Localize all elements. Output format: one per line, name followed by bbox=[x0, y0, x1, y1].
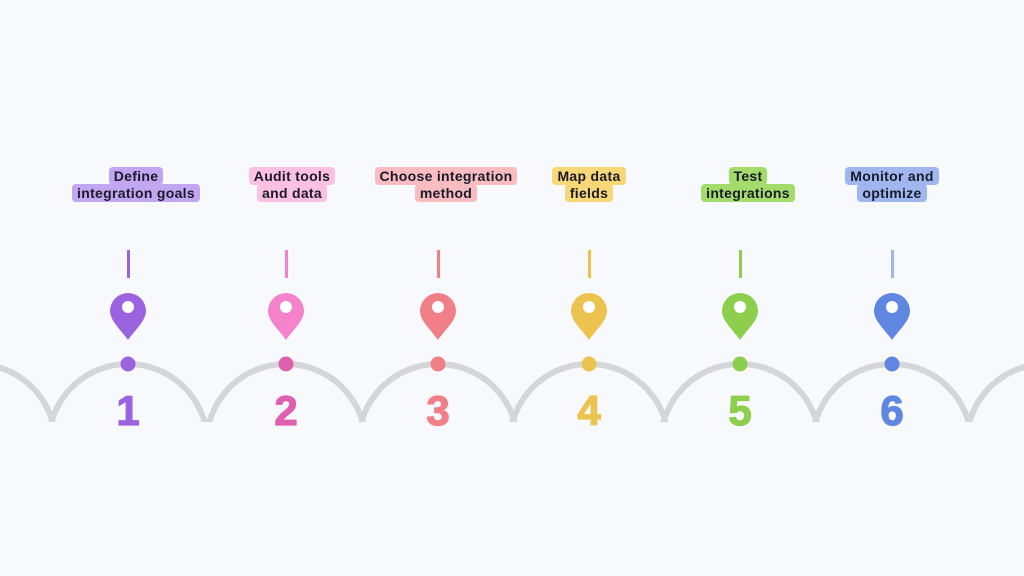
label 5: integrations bbox=[706, 185, 790, 201]
step 5 marker: 5 bbox=[728, 387, 752, 434]
step 1 marker: 1 bbox=[116, 387, 140, 434]
label 3 bbox=[375, 167, 517, 202]
step 3 marker: 3 bbox=[426, 387, 450, 434]
label 1: Define bbox=[114, 168, 158, 184]
label 5: Test bbox=[734, 168, 762, 184]
label 4 bbox=[552, 167, 626, 202]
label 4: fields bbox=[570, 185, 608, 201]
step 4 marker bbox=[571, 250, 607, 434]
step 5 marker bbox=[722, 250, 758, 434]
label 6: optimize bbox=[862, 185, 922, 201]
label 3: Choose integration bbox=[380, 168, 512, 184]
step 6 marker bbox=[874, 250, 910, 434]
label 2: Audit tools bbox=[254, 168, 330, 184]
label 2: and data bbox=[262, 185, 322, 201]
step 2 marker bbox=[268, 250, 304, 434]
label 5 bbox=[701, 167, 795, 202]
step 6 marker: 6 bbox=[880, 387, 904, 434]
step 4 marker: 4 bbox=[577, 387, 601, 434]
label 4: Map data bbox=[557, 168, 621, 184]
step 3 marker bbox=[420, 250, 456, 434]
timeline graphic bbox=[0, 250, 1024, 426]
label 6: Monitor and bbox=[850, 168, 934, 184]
label 1: integration goals bbox=[77, 185, 195, 201]
label 2 bbox=[249, 167, 335, 202]
step 2 marker: 2 bbox=[274, 387, 298, 434]
arcs track bbox=[0, 361, 1024, 422]
label 6 bbox=[845, 167, 939, 202]
step 1 marker bbox=[110, 250, 146, 434]
label 1 bbox=[72, 167, 200, 202]
label 3: method bbox=[420, 185, 472, 201]
